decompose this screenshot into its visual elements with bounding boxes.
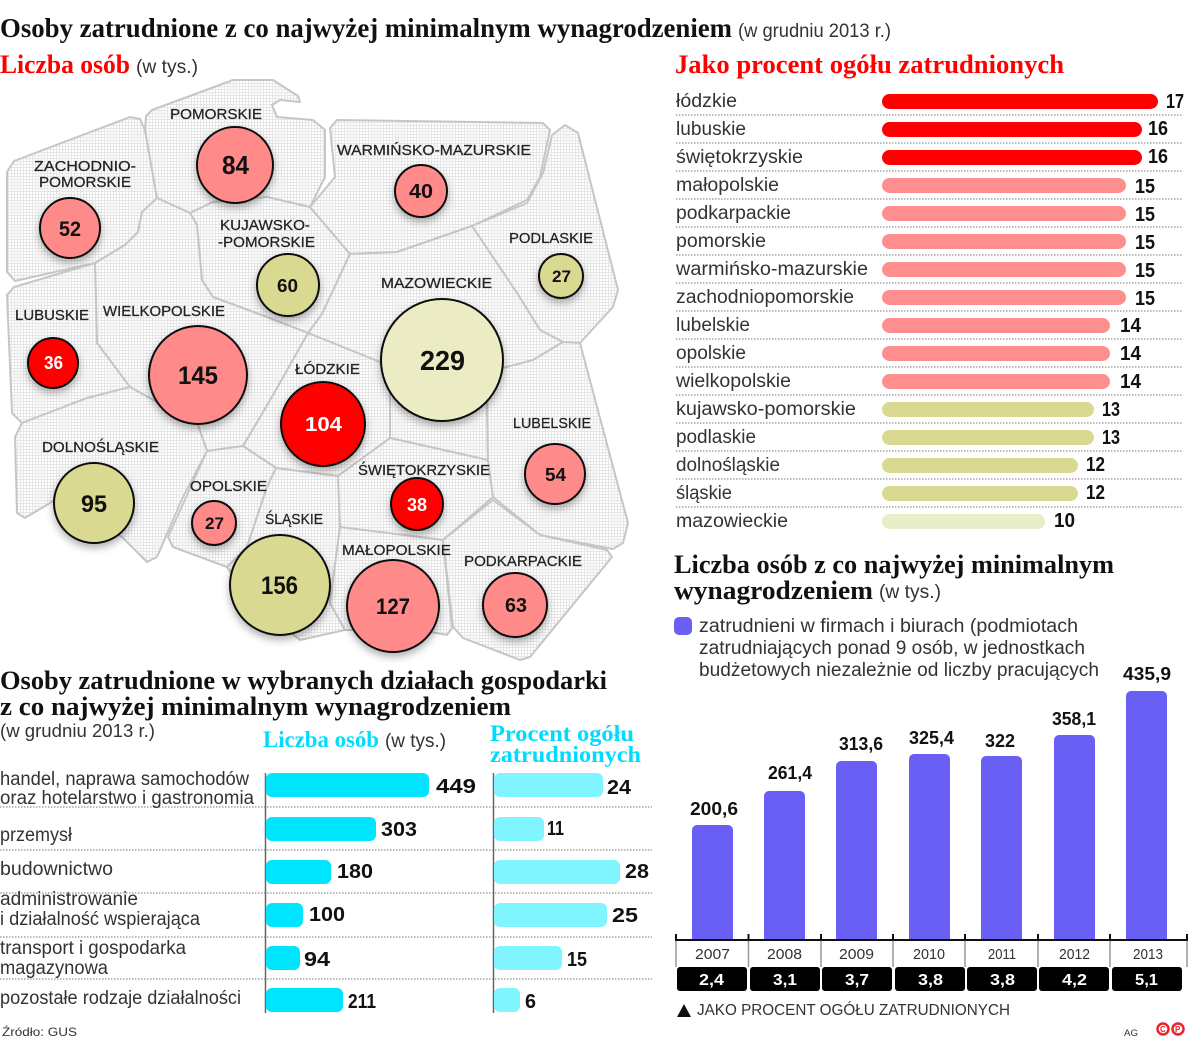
region names: zachodniopomorskie (676, 287, 854, 308)
yearly values: 325,4 (909, 728, 954, 748)
yearly values: 435,9 (1123, 664, 1171, 684)
bubbles with values: 63 (505, 595, 527, 617)
percent values: 13 (1102, 399, 1120, 421)
region names: podlaskie (676, 427, 756, 448)
legend: budżetowych niezależnie od liczby pracujących (699, 660, 1099, 681)
percent boxes: 2,4 (699, 972, 724, 989)
year labels: 2012 (1059, 946, 1090, 963)
region names: śląskie (676, 483, 732, 504)
percent boxes: 3,8 (990, 972, 1015, 989)
bubbles with values: 27 (552, 267, 571, 286)
column heading: number of people (263, 727, 446, 752)
panel: map of people by voivodeship (0, 50, 628, 660)
map heading (0, 50, 198, 79)
bars: number of people (266, 773, 429, 1012)
bubbles with values (28, 127, 585, 652)
icon: copyright marks (1158, 1024, 1184, 1034)
sector values (304, 776, 649, 1013)
region labels (15, 106, 593, 570)
sector values: 211 (348, 991, 376, 1013)
bubbles with values: 40 (409, 181, 433, 203)
source: Źródło: GUS (2, 1024, 77, 1039)
legend: zatrudniających ponad 9 osób, w jednostkach (699, 638, 1085, 659)
yearly values (690, 664, 1171, 819)
region labels: MAZOWIECKIE (381, 275, 492, 292)
percent values: 15 (1135, 260, 1155, 282)
bubbles with values: 52 (59, 218, 81, 241)
percent boxes: 3,8 (918, 972, 943, 989)
percent values: 12 (1086, 482, 1105, 504)
region names: świętokrzyskie (676, 147, 803, 168)
bubbles with values: 27 (205, 514, 224, 533)
sector heading: (w grudniu 2013 r.) (0, 721, 155, 741)
region labels: ŁÓDZKIE (295, 361, 360, 378)
percent values: 14 (1120, 371, 1142, 393)
region labels: PODKARPACKIE (464, 553, 582, 570)
region names: opolskie (676, 343, 746, 364)
region names: lubuskie (676, 119, 746, 140)
yearly values: 322 (985, 731, 1015, 751)
region labels: POMORSKIE (39, 174, 131, 191)
bubbles with values: 38 (407, 495, 427, 515)
percent values: 16 (1148, 146, 1168, 168)
column heading: percent (490, 721, 641, 767)
map heading: Liczba osób (0, 50, 130, 79)
percent values: 15 (1135, 232, 1155, 254)
chart heading: (w tys.) (879, 582, 941, 603)
column heading: percent: Procent ogółu (490, 721, 634, 746)
percent values (1054, 91, 1184, 532)
chart heading (674, 550, 1114, 605)
percent boxes: 4,2 (1062, 972, 1087, 989)
panel: percent of all employed by voivodeship (675, 50, 1184, 532)
legend: percent of all employed: JAKO PROCENT OGÓŁU ZATRUDNIONYCH (697, 1000, 1010, 1019)
percent boxes: 3,1 (773, 972, 797, 989)
region labels: WIELKOPOLSKIE (103, 303, 225, 320)
sector values: 24 (607, 777, 632, 799)
year labels: 2009 (839, 946, 874, 963)
sector names: transport i gospodarka (0, 938, 186, 959)
icon: copyright marks: C (1160, 1025, 1166, 1034)
percent values: 12 (1086, 454, 1105, 476)
chart heading: Liczba osób z co najwyżej minimalnym (674, 550, 1114, 579)
yearly values: 313,6 (839, 734, 883, 754)
main title: (w grudniu 2013 r.) (738, 21, 891, 42)
yearly values: 200,6 (690, 799, 738, 819)
region names: łódzkie (676, 91, 737, 112)
panel: selected economic sectors (0, 666, 652, 1039)
sector values: 28 (625, 861, 649, 883)
main title: Osoby zatrudnione z co najwyżej minimalnym wynagrodzeniem (0, 13, 733, 43)
sector values: 180 (337, 861, 373, 883)
sector names: pozostałe rodzaje działalności (0, 988, 241, 1009)
year labels: 2007 (695, 946, 730, 963)
bubbles with values: 95 (81, 491, 107, 518)
year labels: 2008 (767, 946, 802, 963)
map regions (7, 80, 628, 660)
bubbles with values: 36 (44, 353, 63, 373)
column heading: percent: zatrudnionych (490, 742, 641, 767)
percent boxes: 3,7 (845, 972, 869, 989)
sector names: przemysł (0, 825, 73, 846)
percent values: 15 (1135, 176, 1155, 198)
percent values: 13 (1102, 427, 1120, 449)
yearly values: 261,4 (768, 763, 812, 783)
region names: podkarpackie (676, 203, 791, 224)
sector heading: Osoby zatrudnione w wybranych działach gospodarki (0, 666, 607, 695)
sector names: oraz hotelarstwo i gastronomia (0, 788, 254, 809)
percent values: 16 (1148, 118, 1168, 140)
sector heading: z co najwyżej minimalnym wynagrodzeniem (0, 692, 511, 721)
region names: mazowieckie (676, 511, 788, 532)
yearly bars (692, 691, 1167, 940)
percent rows dividers (676, 115, 1182, 507)
region labels: KUJAWSKO- (220, 217, 310, 234)
region labels: POMORSKIE (170, 106, 262, 123)
bubbles with values: 84 (222, 150, 250, 180)
author initials: AG (1124, 1028, 1138, 1038)
percent values: 10 (1054, 510, 1075, 532)
sector values: 303 (381, 819, 417, 841)
region labels: LUBELSKIE (513, 415, 591, 432)
sector values: 11 (547, 818, 564, 840)
region labels: LUBUSKIE (15, 307, 89, 324)
region names: wielkopolskie (675, 371, 791, 392)
region names: kujawsko-pomorskie (676, 399, 856, 420)
sector axes (266, 773, 494, 1013)
sector names: i działalność wspierająca (0, 909, 200, 930)
percent values: 17 (1166, 91, 1184, 113)
year labels: 2011 (988, 946, 1016, 963)
column heading: number of people: (w tys.) (385, 731, 446, 752)
icon: copyright marks: P (1175, 1025, 1181, 1034)
panel: yearly bar chart (674, 550, 1187, 1038)
percent heading: Jako procent ogółu zatrudnionych (675, 50, 1065, 79)
year labels (695, 946, 1163, 963)
region names: lubelskie (676, 315, 750, 336)
sector heading (0, 666, 607, 741)
percent values: 15 (1135, 288, 1155, 310)
sector names (0, 769, 254, 1009)
percent boxes (677, 967, 1182, 991)
region names: dolnośląskie (676, 455, 780, 476)
region names: pomorskie (676, 231, 766, 252)
bubbles with values: 54 (545, 465, 566, 485)
sector dividers (0, 807, 652, 979)
region labels: PODLASKIE (509, 230, 593, 247)
map heading: (w tys.) (136, 57, 198, 78)
percent values: 14 (1120, 315, 1142, 337)
year labels: 2010 (913, 946, 945, 963)
bubbles with values: 229 (420, 345, 465, 376)
percent boxes: 5,1 (1135, 972, 1158, 989)
region labels: -POMORSKIE (218, 234, 315, 251)
sector names: budownictwo (0, 859, 113, 880)
bubbles with values: 60 (277, 276, 298, 296)
legend: zatrudnieni w firmach i biurach (podmiotach (699, 616, 1078, 637)
sector names: handel, naprawa samochodów (0, 769, 249, 790)
sector names: magazynowa (0, 958, 108, 979)
percent values: 14 (1120, 343, 1142, 365)
region labels: WARMIŃSKO-MAZURSKIE (337, 142, 531, 159)
bubbles with values: 145 (178, 362, 218, 390)
bubbles with values: 104 (305, 414, 343, 436)
region names (675, 91, 868, 532)
sector values: 100 (309, 904, 345, 926)
sector values: 15 (567, 949, 587, 971)
yearly values: 358,1 (1052, 709, 1096, 729)
region labels: DOLNOŚLĄSKIE (42, 438, 159, 456)
sector values: 94 (304, 949, 331, 971)
year labels: 2013 (1133, 946, 1163, 963)
chart heading: wynagrodzeniem (674, 576, 873, 605)
bubbles with values: 156 (261, 572, 298, 600)
region labels: ŚLĄSKIE (265, 510, 323, 528)
bubbles with values: 127 (376, 594, 410, 619)
bars: percent (494, 773, 620, 1012)
percent bars (882, 94, 1158, 529)
region names: warmińsko-mazurskie (675, 259, 868, 280)
column heading: number of people: Liczba osób (263, 727, 379, 752)
region labels: OPOLSKIE (190, 478, 267, 495)
percent values: 15 (1135, 204, 1155, 226)
region labels: MAŁOPOLSKIE (342, 542, 451, 559)
legend (674, 616, 1099, 681)
region names: małopolskie (676, 175, 779, 196)
region labels: ZACHODNIO- (34, 158, 136, 175)
sector values: 25 (612, 905, 638, 927)
sector names: administrowanie (0, 889, 138, 910)
sector values: 6 (525, 991, 536, 1013)
region labels: ŚWIĘTOKRZYSKIE (358, 461, 490, 479)
sector values: 449 (436, 776, 476, 798)
axis with ticks (676, 934, 1187, 967)
